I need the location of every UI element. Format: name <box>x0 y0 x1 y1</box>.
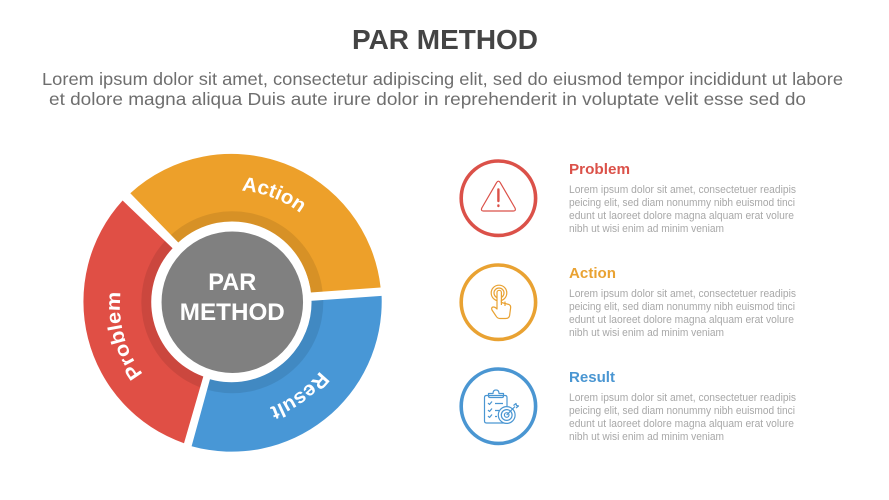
text: result: edunt ut laoreet dolore magna alquam erat volure <box>569 418 794 430</box>
text: result: peicing elit, sed diam nonummy nibh euismod tinci <box>569 405 795 417</box>
center label <box>180 269 285 326</box>
heading: problem: Problem <box>569 162 630 178</box>
text: result <box>569 392 797 443</box>
segment label: result: Result <box>270 372 330 419</box>
text: action: edunt ut laoreet dolore magna alquam erat volure <box>569 314 794 326</box>
icon: clipboard with target <box>461 369 536 443</box>
item: problem <box>461 161 797 235</box>
icon: touch hand <box>461 265 536 339</box>
text: action <box>569 288 797 339</box>
text: problem: peicing elit, sed diam nonummy nibh euismod tinci <box>569 197 795 209</box>
text: action: nibh ut wisi enim ad minim veniam <box>569 327 724 339</box>
text: result: nibh ut wisi enim ad minim veniam <box>569 431 724 443</box>
text: problem: Lorem ipsum dolor sit amet, consectetuer readipis <box>569 184 797 196</box>
segment: result <box>192 296 382 452</box>
segment label: action: Action <box>242 178 304 212</box>
icon: warning triangle <box>461 161 536 235</box>
text: action: peicing elit, sed diam nonummy nibh euismod tinci <box>569 301 795 313</box>
text: problem <box>569 184 797 235</box>
center label: PAR <box>208 269 257 296</box>
center label: METHOD <box>180 299 285 326</box>
center circle <box>157 227 307 377</box>
text: action: Lorem ipsum dolor sit amet, consectetuer readipis <box>569 288 797 300</box>
subtitle: Lorem ipsum dolor sit amet, consectetur adipiscing elit, sed do eiusmod tempor incididunt ut labore <box>42 69 843 89</box>
segment label: problem: Problem <box>107 293 142 381</box>
item: action <box>461 265 797 339</box>
text: problem: edunt ut laoreet dolore magna alquam erat volure <box>569 210 794 222</box>
text: result: Lorem ipsum dolor sit amet, consectetuer readipis <box>569 392 797 404</box>
item: result <box>461 369 797 443</box>
circular diagram <box>83 154 382 452</box>
inner shadow ring <box>141 211 323 393</box>
segment: action <box>130 154 381 292</box>
subtitle: et dolore magna aliqua Duis aute irure dolor in reprehenderit in voluptate velit esse sed do <box>49 89 806 109</box>
segment: problem <box>83 200 203 443</box>
subtitle <box>42 69 843 109</box>
text: problem: nibh ut wisi enim ad minim veniam <box>569 223 724 235</box>
heading: result: Result <box>569 370 615 386</box>
title: PAR METHOD <box>352 24 538 55</box>
heading: action: Action <box>569 266 616 282</box>
